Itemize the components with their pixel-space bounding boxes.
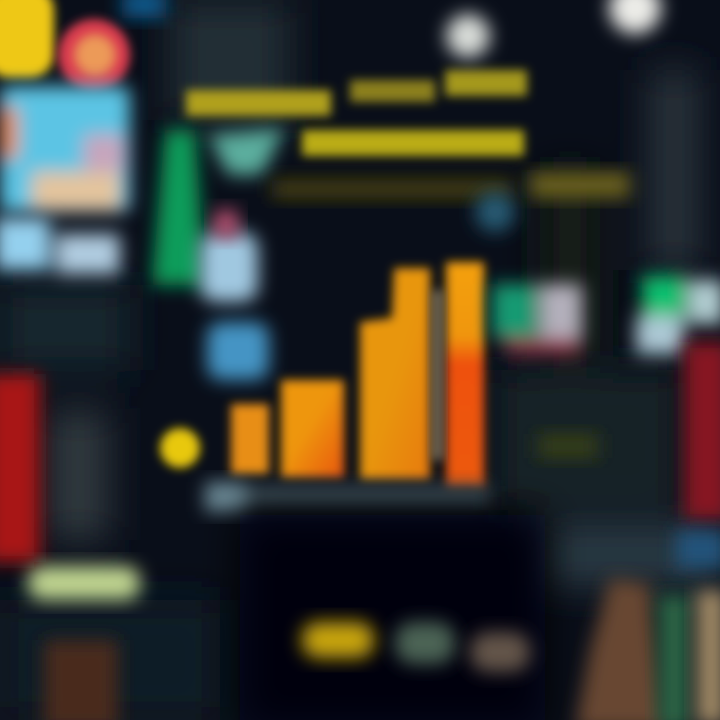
light green label: [28, 566, 140, 600]
panel: bottom counter: [240, 515, 545, 720]
blue strip: [0, 218, 120, 274]
bar 3: [360, 268, 430, 480]
colourful billboard: [0, 86, 130, 212]
brown figure: [575, 578, 665, 720]
dim olive label: [538, 434, 598, 458]
green label: [395, 622, 455, 664]
green and pink tile: [492, 284, 582, 354]
teal icon: [208, 128, 285, 175]
panel: bottom right figures: [575, 578, 720, 720]
icon: top blue sign: [122, 0, 166, 18]
blue icon: [207, 322, 269, 380]
green figure: [658, 595, 690, 720]
bar 1: [231, 404, 269, 474]
yellow label: [302, 622, 374, 658]
bar 2: [281, 380, 344, 478]
pale blue icon: [200, 232, 258, 302]
blue dot near subtitle: [475, 192, 515, 232]
green vertical shape: [152, 130, 205, 285]
red panel: [684, 342, 720, 520]
bar chart: [231, 262, 484, 488]
subtitle: [272, 172, 630, 198]
title: [186, 70, 527, 156]
tan figure: [696, 590, 720, 720]
brown block: [44, 640, 118, 720]
bar 4: [446, 262, 484, 488]
icon: yellow sign: [0, 0, 54, 78]
tan label: [470, 632, 530, 672]
panel: middle icons: [152, 128, 285, 468]
chart base: [205, 482, 490, 512]
panel: left signage: [0, 0, 166, 720]
icon: pink circle: [58, 19, 130, 91]
gap between bars: [431, 290, 444, 460]
yellow coin: [160, 428, 200, 468]
icon: top lights: [446, 0, 661, 58]
green and white tile: [636, 276, 720, 354]
red panel: [0, 374, 40, 562]
blue base: [676, 530, 720, 568]
black counter: [240, 515, 545, 720]
panel: right tiles: [492, 276, 720, 568]
